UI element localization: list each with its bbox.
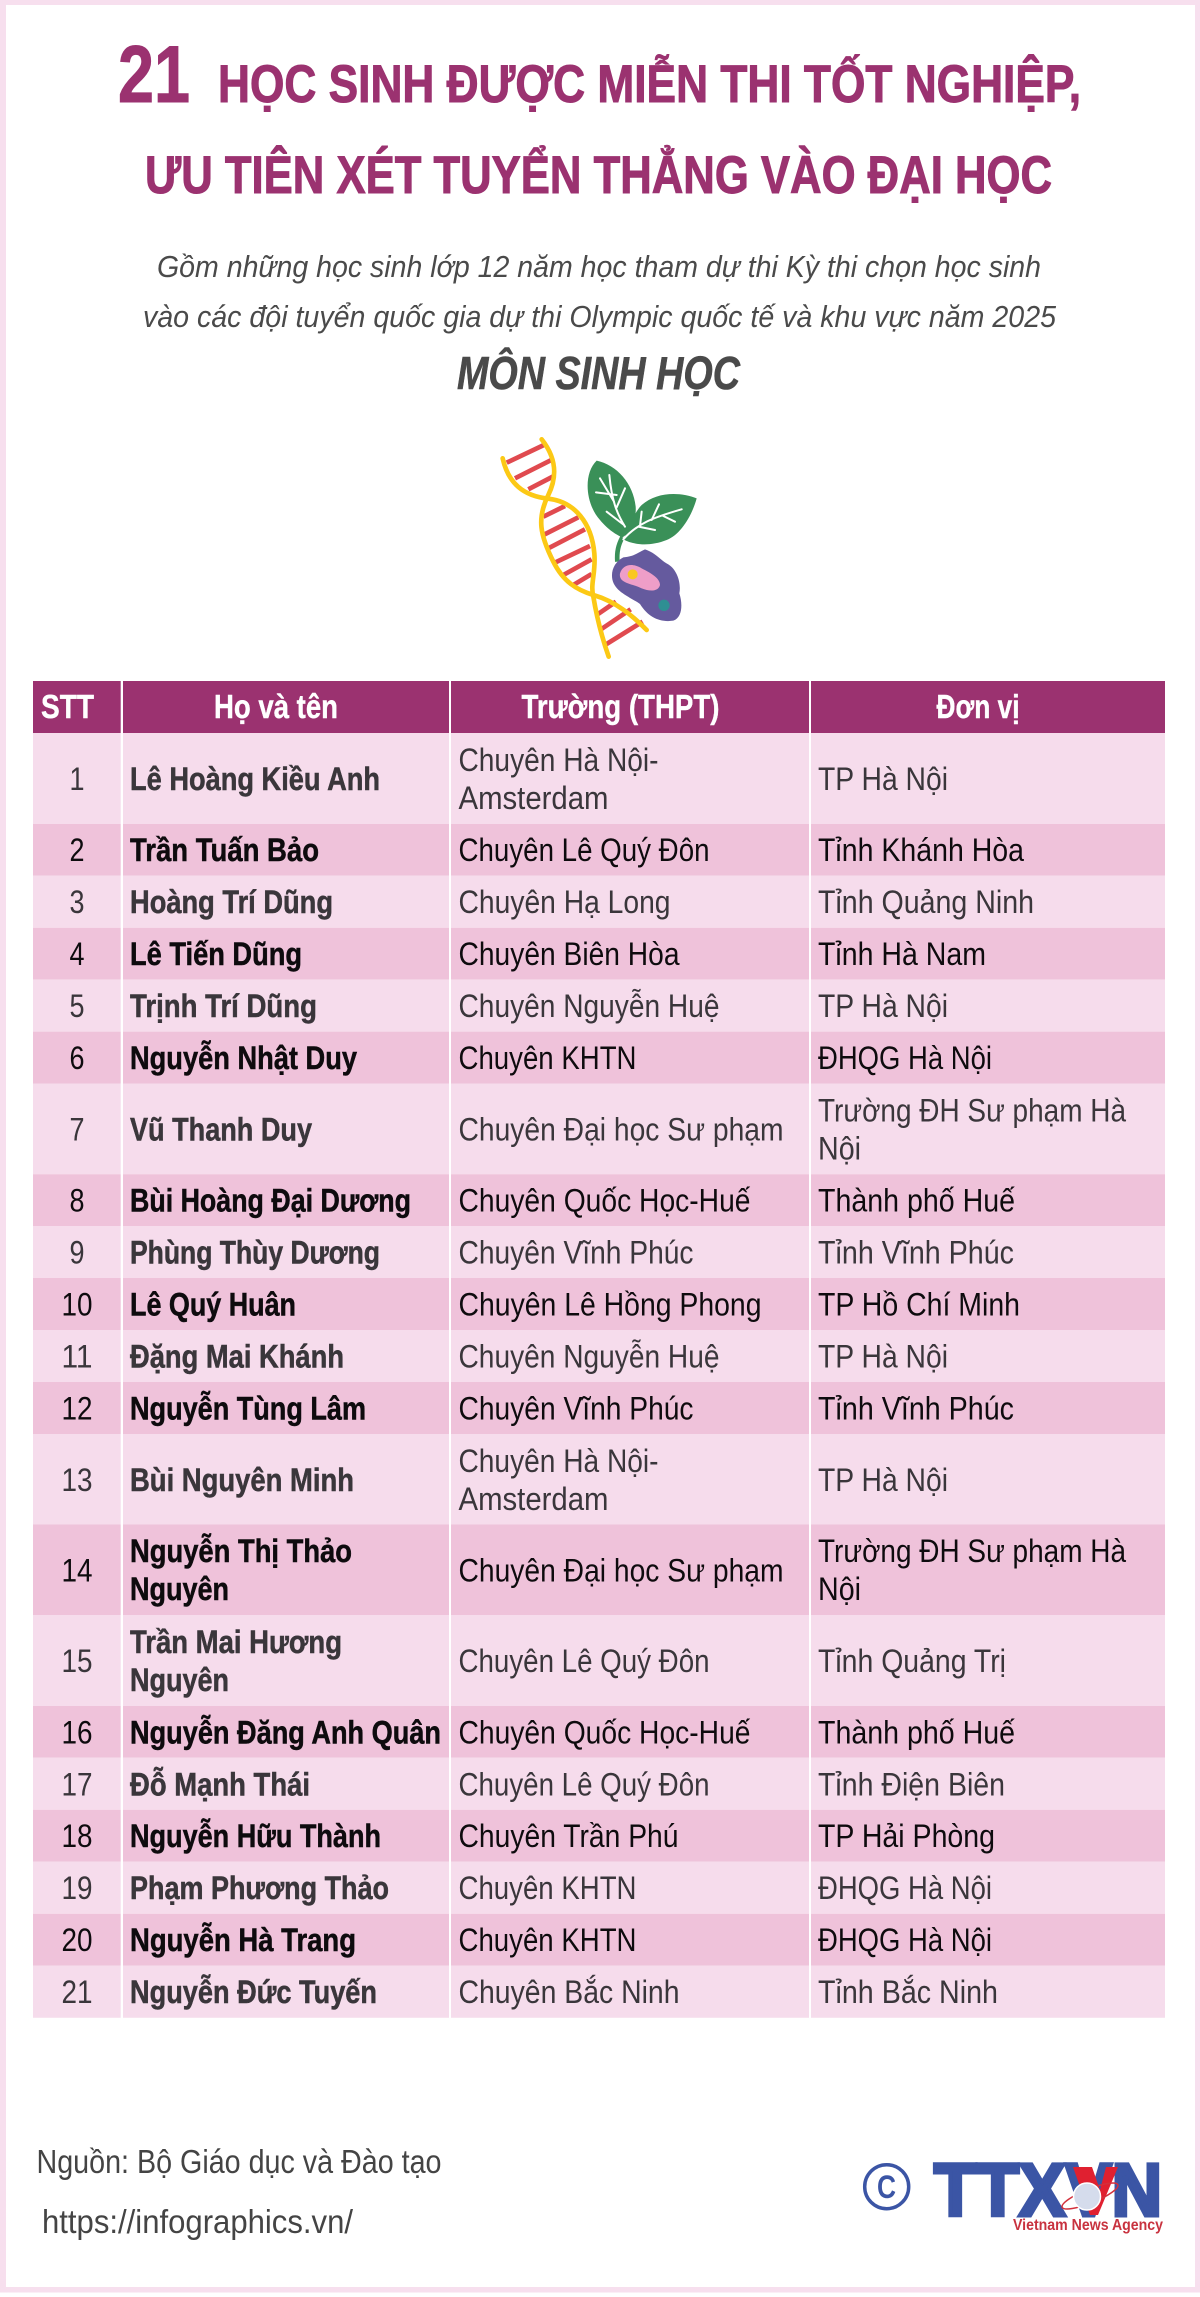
source credit: Nguồn: Bộ Giáo dục và Đào tạo: [36, 2143, 442, 2180]
row 2: Trần Tuấn Bảo: [130, 832, 319, 868]
row 2: Tỉnh Khánh Hòa: [818, 832, 1024, 868]
row 10: TP Hồ Chí Minh: [818, 1286, 1020, 1322]
row 14: Trường ĐH Sư phạm Hà: [818, 1533, 1126, 1569]
subtitle: [143, 249, 1057, 334]
row 21: [33, 1966, 1165, 2018]
row 15: Nguyên: [130, 1662, 229, 1698]
row 14: Nguyễn Thị Thảo: [130, 1533, 352, 1569]
row 8: Thành phố Huế: [818, 1182, 1015, 1218]
row 6: Nguyễn Nhật Duy: [130, 1040, 357, 1076]
row 5: Trịnh Trí Dũng: [130, 988, 317, 1024]
row 7: 7: [70, 1112, 84, 1148]
table: [33, 681, 1165, 2018]
row 18: Chuyên Trần Phú: [458, 1818, 678, 1854]
subtitle: vào các đội tuyển quốc gia dự thi Olympic quốc tế và khu vực năm 2025: [143, 299, 1057, 334]
row 5: TP Hà Nội: [818, 988, 948, 1024]
row 1: Amsterdam: [458, 780, 608, 816]
row 15: Trần Mai Hương: [130, 1624, 342, 1660]
row 14: [33, 1524, 1165, 1615]
row 20: 20: [62, 1922, 92, 1958]
row 2: 2: [70, 832, 84, 868]
row 3: 3: [70, 884, 84, 920]
row 13: 13: [62, 1462, 92, 1498]
row 20: [33, 1914, 1165, 1966]
row 21: Tỉnh Bắc Ninh: [818, 1974, 998, 2010]
table header row: Họ và tên: [214, 688, 338, 725]
row 16: [33, 1706, 1165, 1758]
row 17: Chuyên Lê Quý Đôn: [458, 1766, 710, 1802]
row 4: [33, 928, 1165, 980]
row 17: 17: [62, 1766, 92, 1802]
row 3: [33, 876, 1165, 928]
logo: TTXVN Vietnam News Agency: TTXVN: [934, 2148, 1162, 2232]
row 9: [33, 1226, 1165, 1278]
row 7: Vũ Thanh Duy: [130, 1112, 312, 1148]
logo: TTXVN Vietnam News Agency: Vietnam News Agency: [1013, 2217, 1163, 2234]
title: 21: [118, 30, 190, 120]
row 9: Tỉnh Vĩnh Phúc: [818, 1234, 1014, 1270]
row 14: Nội: [818, 1571, 861, 1607]
row 11: Đặng Mai Khánh: [130, 1338, 344, 1374]
row 7: Nội: [818, 1130, 861, 1166]
row 10: 10: [62, 1286, 92, 1322]
row 16: Thành phố Huế: [818, 1714, 1015, 1750]
row 3: Chuyên Hạ Long: [458, 884, 670, 920]
row 8: [33, 1174, 1165, 1226]
row 5: [33, 980, 1165, 1032]
row 12: Nguyễn Tùng Lâm: [130, 1390, 366, 1426]
row 17: [33, 1758, 1165, 1810]
row 20: Chuyên KHTN: [458, 1922, 636, 1958]
copyright icon: [865, 2165, 909, 2209]
row 16: 16: [62, 1714, 92, 1750]
subtitle: Gồm những học sinh lớp 12 năm học tham dự thi Kỳ thi chọn học sinh: [157, 249, 1041, 284]
row 9: Phùng Thùy Dương: [130, 1234, 380, 1270]
row 20: Nguyễn Hà Trang: [130, 1922, 356, 1958]
row 10: [33, 1278, 1165, 1330]
row 11: [33, 1330, 1165, 1382]
row 10: Chuyên Lê Hồng Phong: [458, 1286, 762, 1322]
row 1: Chuyên Hà Nội-: [458, 742, 658, 778]
row 8: Chuyên Quốc Học-Huế: [458, 1182, 751, 1218]
icon: DNA, leaves and cell: [503, 439, 697, 657]
row 8: Bùi Hoàng Đại Dương: [130, 1182, 411, 1218]
copyright icon: C: [877, 2169, 896, 2205]
row 12: Tỉnh Vĩnh Phúc: [818, 1390, 1014, 1426]
row 1: 1: [70, 761, 84, 797]
row 12: [33, 1382, 1165, 1434]
row 16: Nguyễn Đăng Anh Quân: [130, 1714, 441, 1750]
row 10: Lê Quý Huân: [130, 1286, 296, 1322]
row 19: [33, 1862, 1165, 1914]
row 13: TP Hà Nội: [818, 1462, 948, 1498]
row 20: ĐHQG Hà Nội: [818, 1922, 992, 1958]
row 11: Chuyên Nguyễn Huệ: [458, 1338, 720, 1374]
row 3: Hoàng Trí Dũng: [130, 884, 333, 920]
row 18: 18: [62, 1818, 92, 1854]
title: [118, 30, 1081, 205]
row 7: [33, 1084, 1165, 1174]
row 2: [33, 824, 1165, 876]
row 5: Chuyên Nguyễn Huệ: [458, 988, 720, 1024]
row 13: Bùi Nguyên Minh: [130, 1462, 354, 1498]
row 4: Chuyên Biên Hòa: [458, 936, 680, 972]
row 17: Đỗ Mạnh Thái: [130, 1766, 310, 1802]
row 9: Chuyên Vĩnh Phúc: [458, 1234, 694, 1270]
table header row: Đơn vị: [936, 688, 1020, 725]
row 1: TP Hà Nội: [818, 761, 948, 797]
row 6: 6: [70, 1040, 84, 1076]
row 12: Chuyên Vĩnh Phúc: [458, 1390, 694, 1426]
row 19: Chuyên KHTN: [458, 1870, 636, 1906]
row 15: Tỉnh Quảng Trị: [818, 1643, 1006, 1679]
row 14: Chuyên Đại học Sư phạm: [458, 1552, 784, 1588]
row 6: ĐHQG Hà Nội: [818, 1040, 992, 1076]
row 17: Tỉnh Điện Biên: [818, 1766, 1005, 1802]
website url: https://infographics.vn/: [42, 2203, 354, 2240]
row 6: Chuyên KHTN: [458, 1040, 636, 1076]
table header row: STT: [41, 688, 94, 725]
row 21: Nguyễn Đức Tuyến: [130, 1974, 377, 2010]
row 7: Chuyên Đại học Sư phạm: [458, 1112, 784, 1148]
row 19: Phạm Phương Thảo: [130, 1870, 389, 1906]
row 13: [33, 1434, 1165, 1524]
row 18: Nguyễn Hữu Thành: [130, 1818, 381, 1854]
row 1: [33, 733, 1165, 824]
row 8: 8: [70, 1182, 84, 1218]
row 4: Lê Tiến Dũng: [130, 936, 302, 972]
row 21: Chuyên Bắc Ninh: [458, 1974, 680, 2010]
row 2: Chuyên Lê Quý Đôn: [458, 832, 710, 868]
row 4: Tỉnh Hà Nam: [818, 936, 986, 972]
row 11: TP Hà Nội: [818, 1338, 948, 1374]
row 15: [33, 1615, 1165, 1706]
row 18: TP Hải Phòng: [818, 1818, 995, 1854]
row 18: [33, 1810, 1165, 1862]
row 14: 14: [62, 1552, 92, 1588]
row 19: ĐHQG Hà Nội: [818, 1870, 992, 1906]
row 11: 11: [62, 1338, 92, 1374]
row 5: 5: [70, 988, 84, 1024]
row 1: Lê Hoàng Kiều Anh: [130, 761, 380, 797]
table header row: [33, 681, 1165, 733]
table header row: Trường (THPT): [522, 688, 720, 725]
row 3: Tỉnh Quảng Ninh: [818, 884, 1034, 920]
row 7: Trường ĐH Sư phạm Hà: [818, 1092, 1126, 1128]
row 12: 12: [62, 1390, 92, 1426]
row 13: Amsterdam: [458, 1481, 608, 1517]
row 4: 4: [70, 936, 84, 972]
row 6: [33, 1032, 1165, 1084]
row 19: 19: [62, 1870, 92, 1906]
row 16: Chuyên Quốc Học-Huế: [458, 1714, 751, 1750]
row 15: 15: [62, 1643, 92, 1679]
subject heading: MÔN SINH HỌC: [457, 347, 741, 399]
row 14: Nguyên: [130, 1571, 229, 1607]
row 21: 21: [62, 1974, 92, 2010]
row 9: 9: [70, 1234, 84, 1270]
row 13: Chuyên Hà Nội-: [458, 1443, 658, 1479]
row 15: Chuyên Lê Quý Đôn: [458, 1643, 710, 1679]
